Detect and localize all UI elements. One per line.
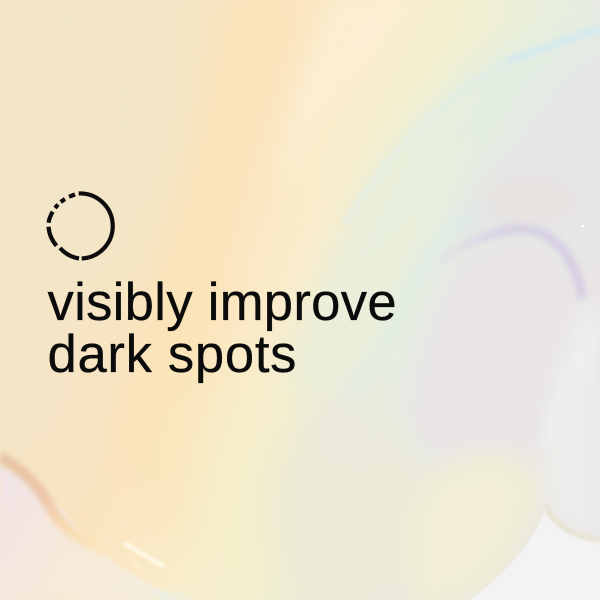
background: lilac curved lobe — [406, 178, 584, 468]
background: thin blue iridescent streaks — [345, 28, 600, 395]
heading: visibly improve dark spots — [48, 273, 397, 384]
heading: visibly improve dark spots: visibly improve — [48, 273, 397, 332]
background: white surface lower right — [470, 505, 600, 600]
background: white creamy fold at right — [403, 300, 600, 600]
heading: visibly improve dark spots: dark spots — [48, 325, 297, 384]
background: pale surface lower left — [0, 457, 200, 600]
icon: dashed progress ring — [48, 193, 113, 258]
